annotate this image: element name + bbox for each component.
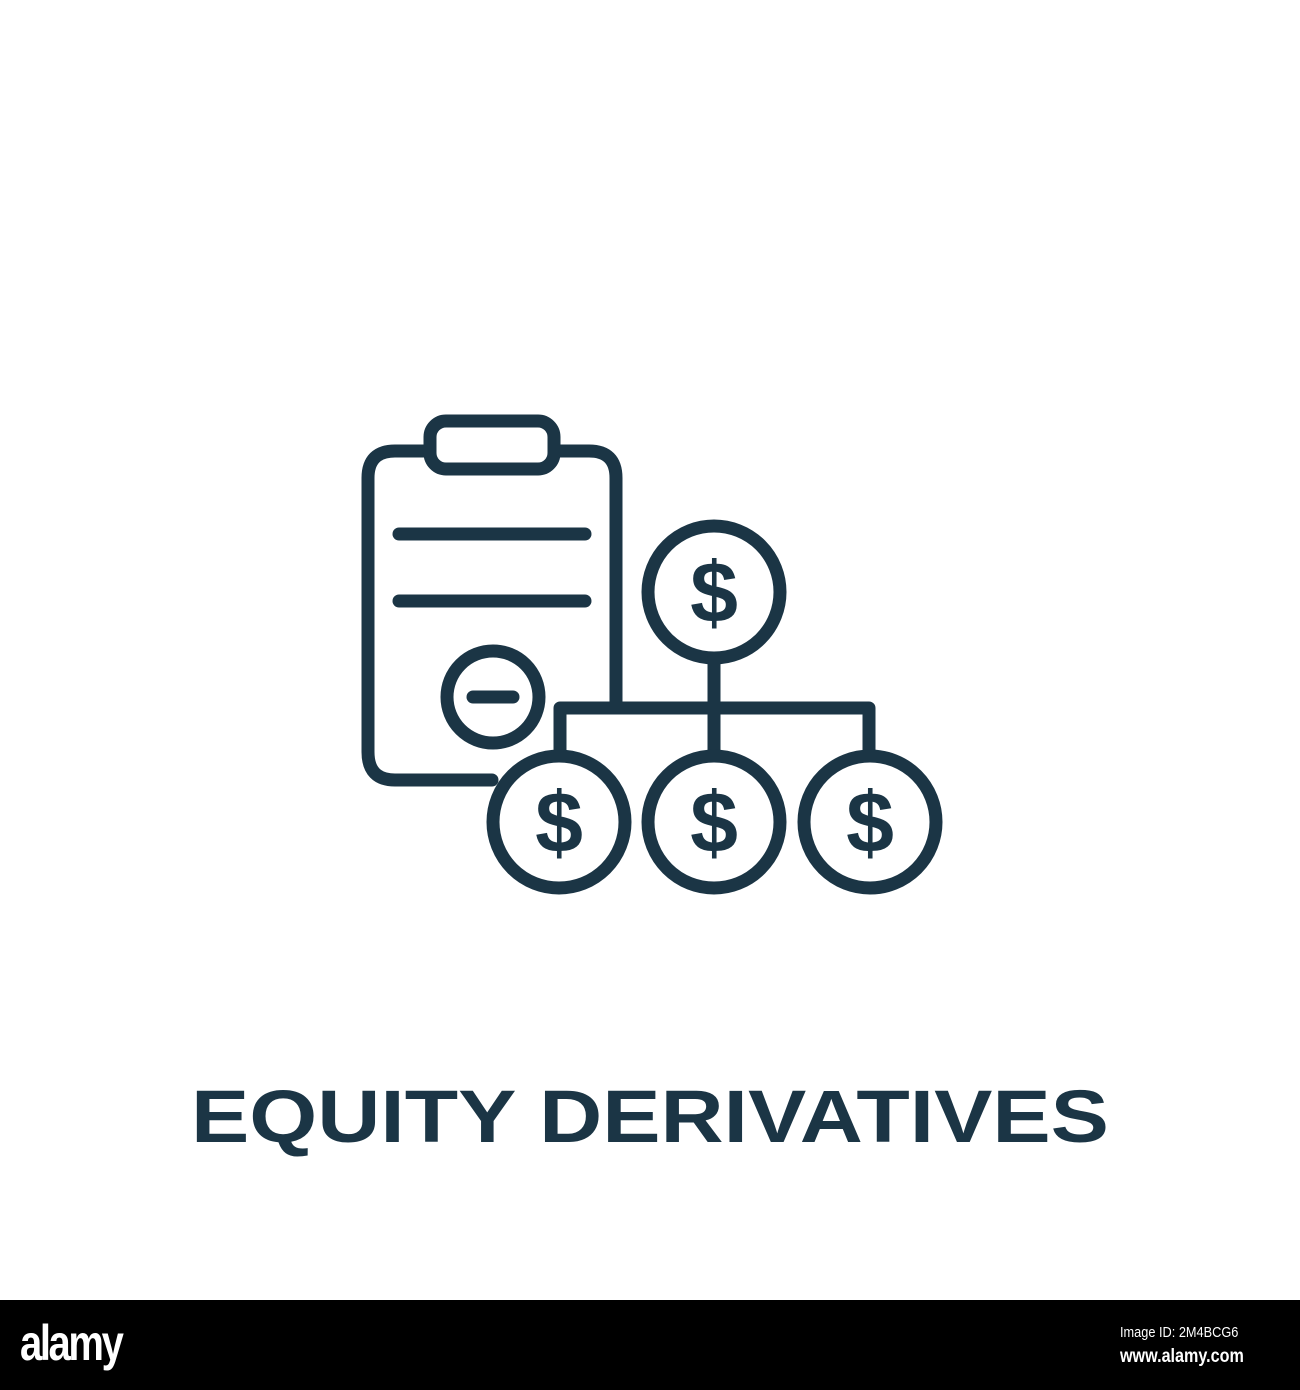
dollar signs: $ (690, 545, 738, 641)
dollar signs (535, 545, 894, 871)
icon: coin tree (493, 526, 936, 888)
dollar signs: $ (535, 775, 583, 871)
dollar signs: $ (846, 775, 894, 871)
image id: Image ID: 2M4BCG6 (1120, 1324, 1238, 1341)
dollar signs: $ (690, 775, 738, 871)
footer bar (0, 1300, 1300, 1390)
icon: clipboard (368, 421, 616, 780)
url: www.alamy.com (1120, 1346, 1244, 1367)
logo: alamy (20, 1315, 121, 1371)
title: EQUITY DERIVATIVES (191, 1075, 1109, 1158)
